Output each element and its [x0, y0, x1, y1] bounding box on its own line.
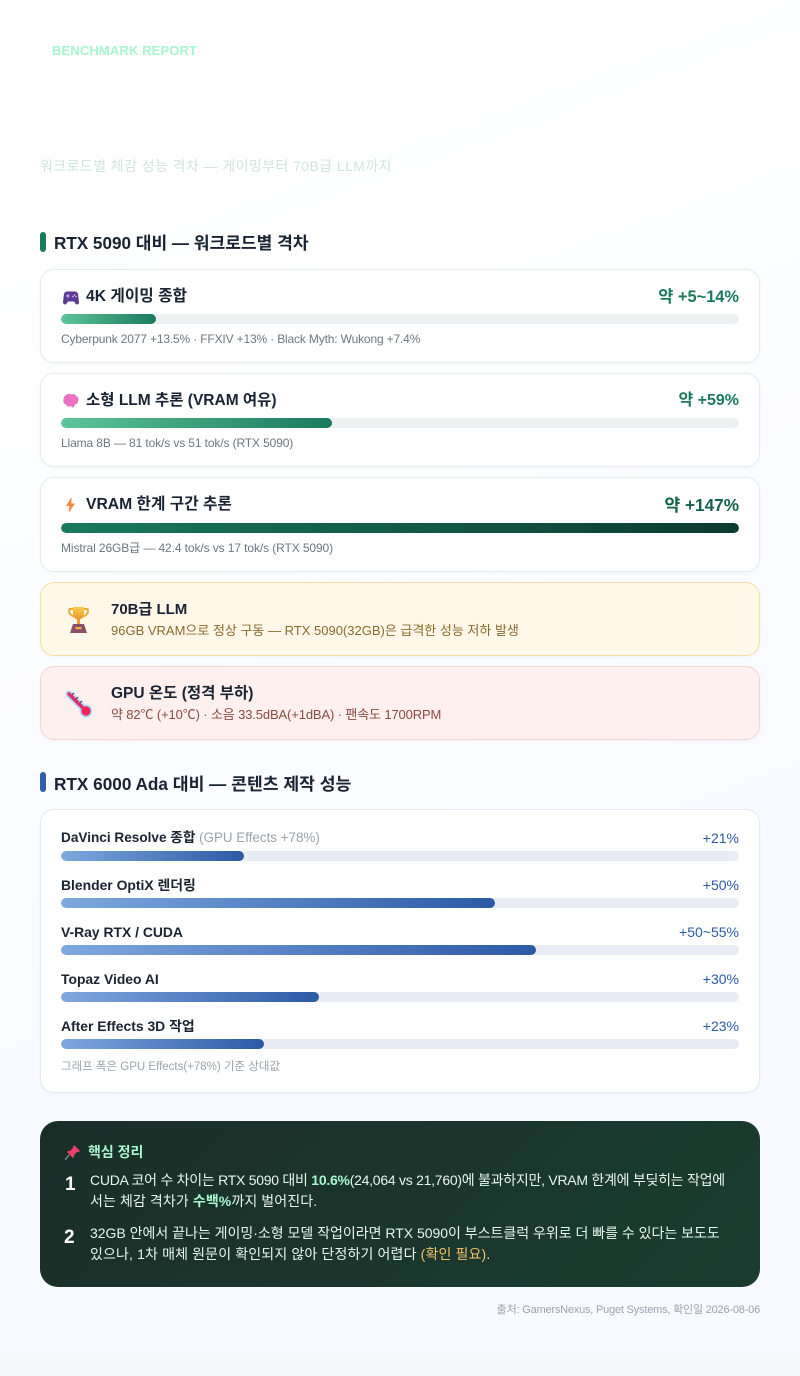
callout detail: 약 82℃ (+10℃) · 소음 33.5dBA(+1dBA) · 팬속도 1700RPM	[111, 707, 441, 722]
progress bar	[61, 418, 739, 428]
card title: 4K 게이밍 종합	[86, 288, 187, 305]
takeaways heading: 핵심 정리	[88, 1144, 143, 1160]
takeaway number 2: 2	[64, 1227, 75, 1248]
icon: pushpin	[65, 1145, 80, 1160]
bar: DaVinci	[61, 851, 739, 861]
card detail: Mistral 26GB급 — 42.4 tok/s vs 17 tok/s (RTX 5090)	[61, 541, 333, 555]
icon: game controller	[63, 292, 79, 304]
section heading: RTX 5090: RTX 5090 대비 — 워크로드별 격차	[54, 234, 309, 253]
row label: Topaz: Topaz Video AI	[61, 971, 159, 987]
row label: Blender: Blender OptiX 렌더링	[61, 877, 196, 893]
takeaway text 1: CUDA 코어 수 차이는 RTX 5090 대비 10.6%(24,064 vs 21,760)에 불과하지만, VRAM 한계에 부딪히는 작업에	[90, 1172, 725, 1188]
source note: 출처: GamersNexus, Puget Systems, 확인일 2026-08-06	[497, 1304, 760, 1316]
card detail: Cyberpunk 2077 +13.5% · FFXIV +13% · Black Myth: Wukong +7.4%	[61, 332, 420, 346]
panel: small LLM	[40, 373, 760, 467]
takeaway text 2	[90, 1225, 720, 1262]
icon: trophy	[68, 607, 89, 633]
bar: Blender	[61, 898, 739, 908]
row label: DaVinci: DaVinci Resolve 종합 (GPU Effects +78%)	[61, 830, 320, 845]
bar: V-Ray	[61, 945, 739, 955]
card detail: Llama 8B — 81 tok/s vs 51 tok/s (RTX 5090)	[61, 436, 293, 450]
takeaway text 1: 서는 체감 격차가 수백%까지 벌어진다.	[90, 1193, 317, 1209]
panel: VRAM limit	[40, 477, 760, 572]
panel: content creation	[40, 809, 760, 1093]
bar: After Effects	[61, 1039, 739, 1049]
row label: V-Ray: V-Ray RTX / CUDA	[61, 924, 183, 940]
callout title: GPU 온도 (정격 부하)	[111, 685, 253, 702]
icon: thermometer	[66, 690, 92, 718]
card value: 약 +147%	[664, 495, 739, 515]
subtitle: 워크로드별 체감 성능 격차 — 게이밍부터 70B급 LLM까지	[40, 158, 392, 174]
card value: 약 +5~14%	[658, 288, 739, 306]
row label: After Effects: After Effects 3D 작업	[61, 1018, 195, 1034]
takeaway text 1	[90, 1172, 725, 1209]
panel: 4K gaming	[40, 269, 760, 363]
row value: +30%	[703, 971, 739, 987]
chart footnote: 그래프 폭은 GPU Effects(+78%) 기준 상대값	[61, 1061, 280, 1073]
panel: key takeaways	[40, 1121, 760, 1287]
bar: Topaz	[61, 992, 739, 1002]
callout title: 70B급 LLM	[111, 601, 187, 618]
eyebrow label: BENCHMARK REPORT	[52, 43, 197, 58]
row value: +50~55%	[679, 924, 739, 940]
progress bar	[61, 523, 739, 533]
callout: 70B LLM	[40, 582, 760, 656]
takeaway number 1: 1	[65, 1174, 76, 1195]
card title: 소형 LLM 추론 (VRAM 여유)	[86, 392, 277, 409]
takeaway text 2: 있으나, 1차 매체 원문이 확인되지 않아 단정하기 어렵다 (확인 필요).	[90, 1246, 490, 1262]
section heading: RTX 6000 Ada: RTX 6000 Ada 대비 — 콘텐츠 제작 성능	[54, 774, 351, 794]
card value: 약 +59%	[678, 392, 739, 409]
icon: brain	[63, 394, 78, 408]
callout detail: 96GB VRAM으로 정상 구동 — RTX 5090(32GB)은 급격한 성능 저하 발생	[111, 623, 519, 638]
card title: VRAM 한계 구간 추론	[86, 496, 232, 513]
takeaway text 2: 32GB 안에서 끝나는 게이밍·소형 모델 작업이라면 RTX 5090이 부스트클럭 우위로 더 빠를 수 있다는 보도도	[90, 1225, 720, 1241]
row value: +23%	[703, 1018, 739, 1034]
progress bar	[61, 314, 739, 324]
row value: +50%	[703, 877, 739, 893]
row value: +21%	[703, 830, 739, 846]
icon: lightning	[66, 497, 75, 513]
callout: GPU temperature	[40, 666, 760, 740]
